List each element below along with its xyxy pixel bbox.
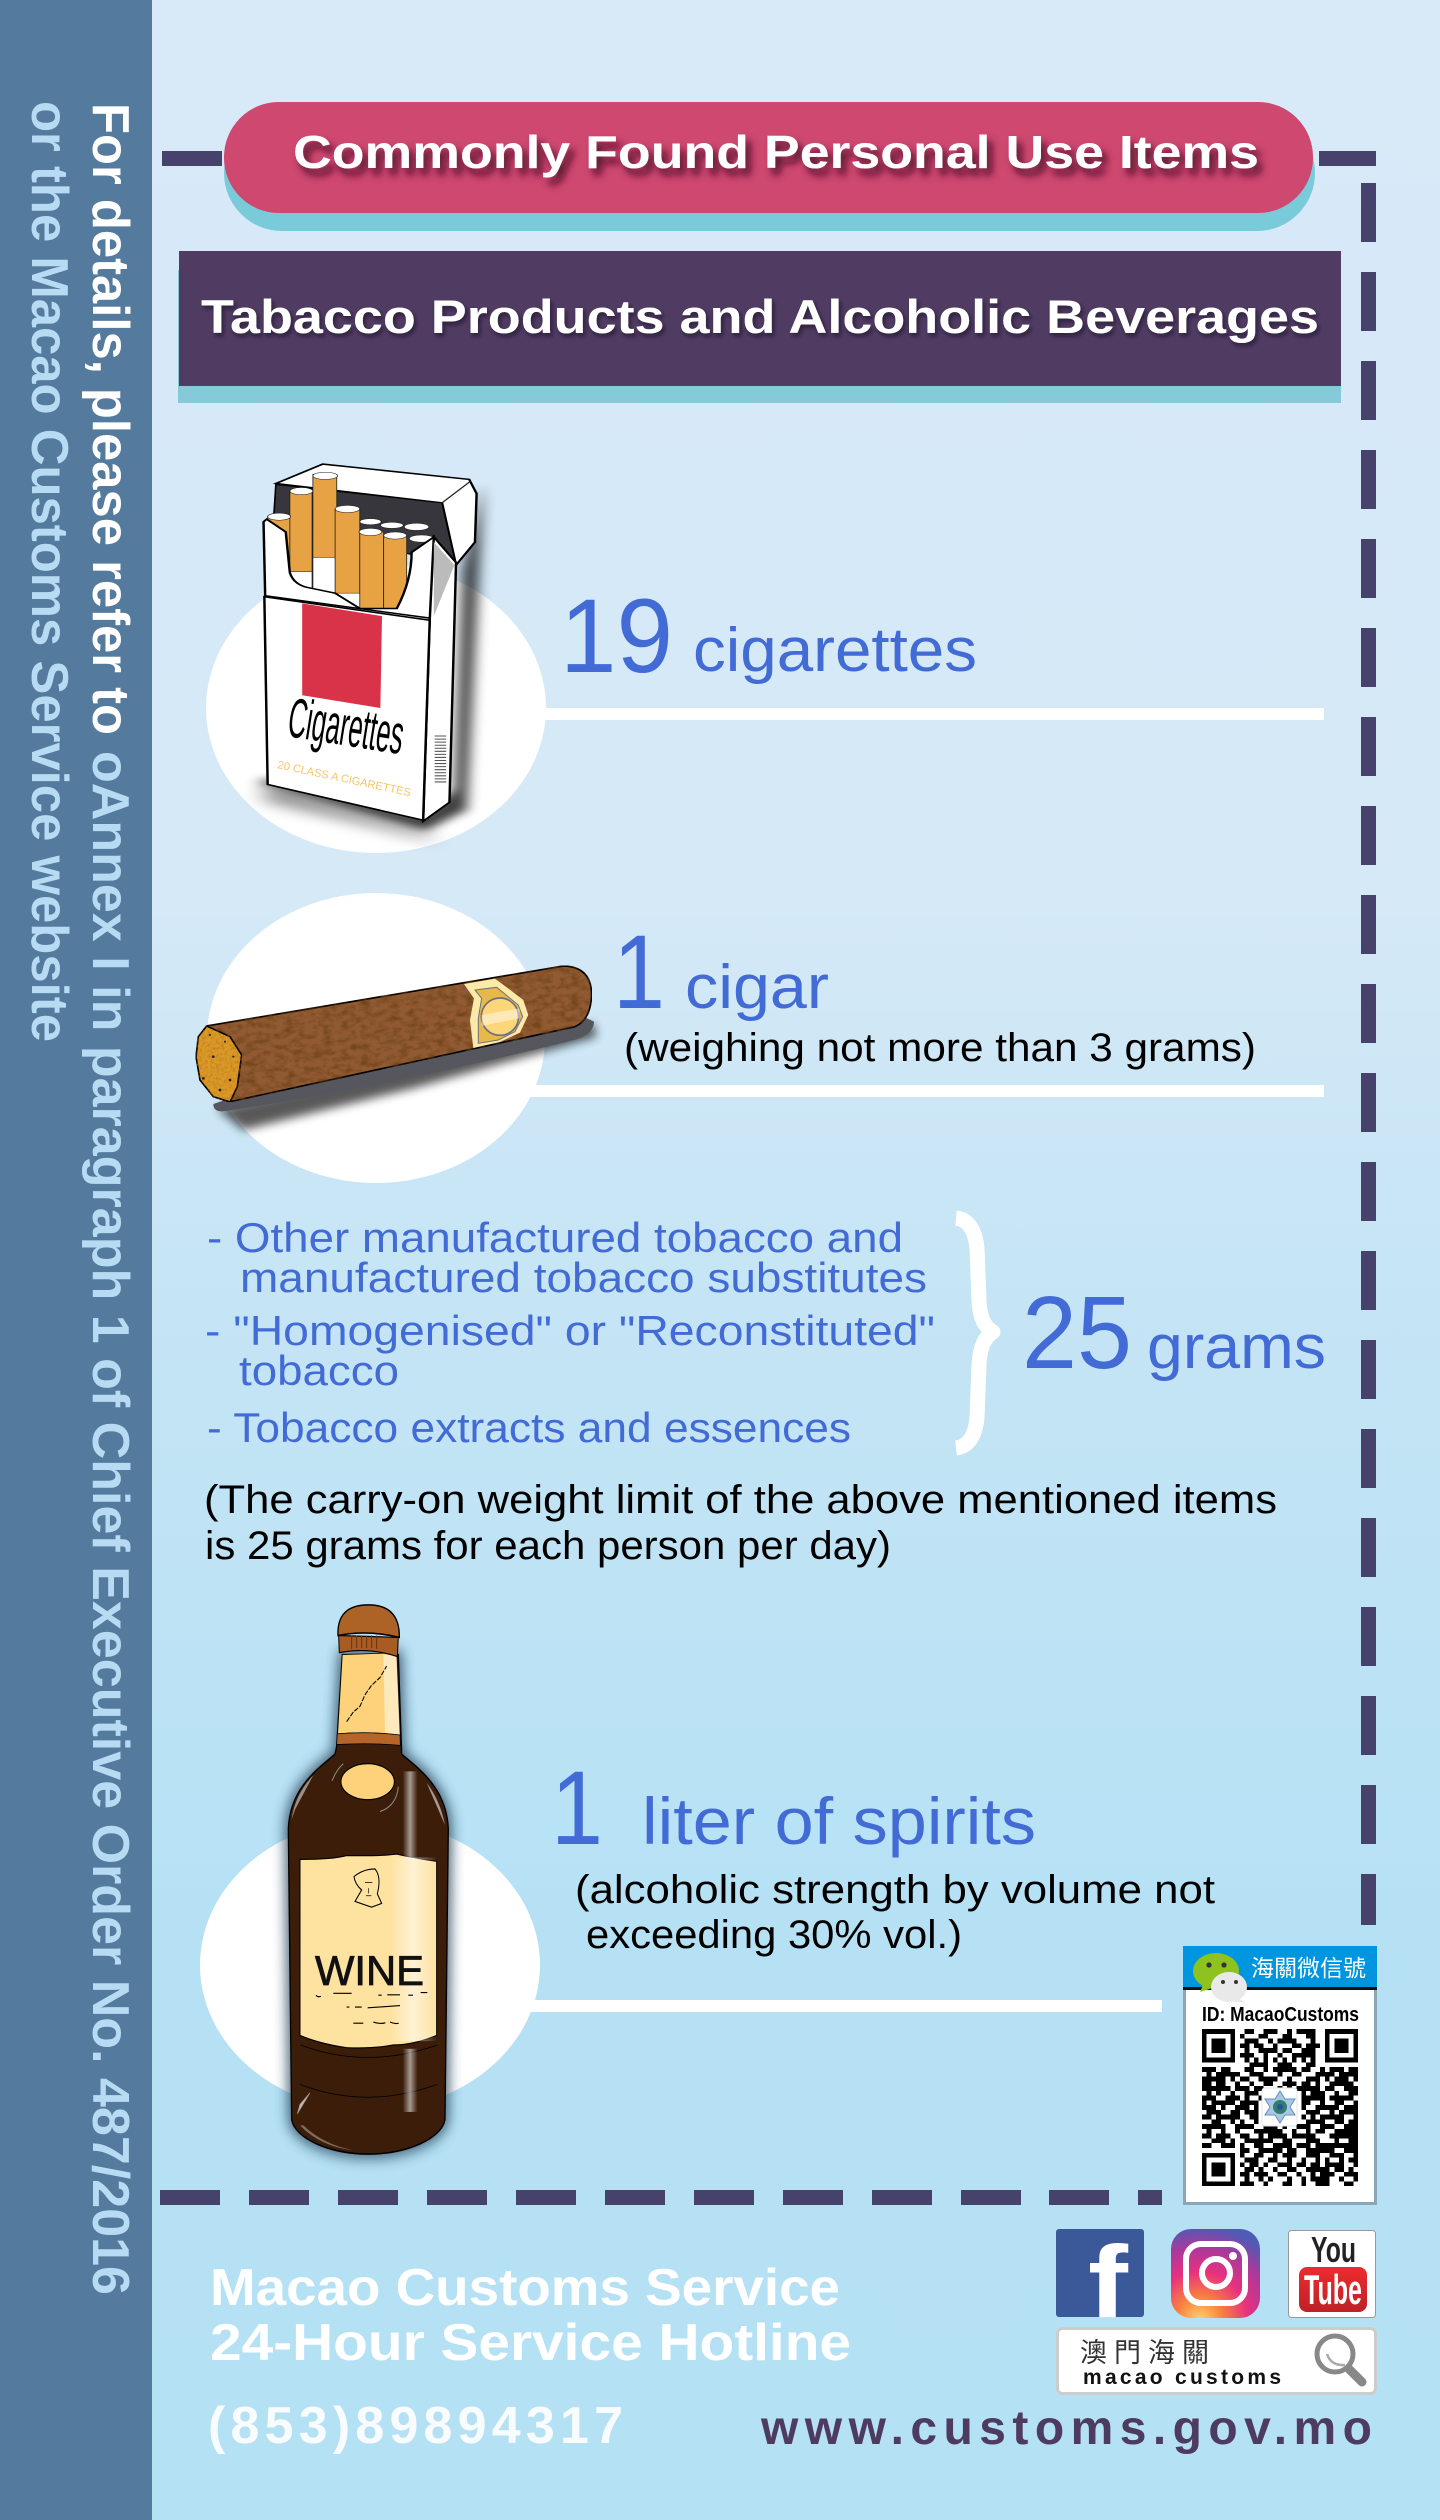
band	[464, 979, 528, 1048]
cigarettes	[268, 472, 434, 608]
text: 1 cigar: 1	[613, 914, 665, 1031]
search box	[1058, 2328, 1376, 2394]
neck label	[338, 1653, 400, 1735]
text: 19 cigarettes	[560, 578, 977, 695]
bottle label text: WINE	[315, 1947, 424, 1994]
list: other tobacco products: - Other manufactured tobacco and	[207, 1214, 903, 1261]
text: 1 liter of spirits	[551, 1750, 1036, 1867]
text: cigar weight note: (weighing not more than 3 grams)	[624, 1026, 1256, 1070]
pack front	[264, 597, 430, 820]
portrait	[354, 1869, 382, 1907]
text: 1 cigar	[613, 914, 829, 1031]
list: other tobacco products: - "Homogenised" or "Reconstituted"	[205, 1307, 935, 1354]
WeChat QR card	[1183, 1946, 1377, 2204]
hotline heading: Macao Customs Service	[210, 2259, 840, 2317]
cap	[339, 1635, 398, 1657]
text: 25 grams: 25	[1022, 1275, 1132, 1390]
text: carry-on note	[204, 1478, 1277, 1568]
section heading bar	[178, 251, 1341, 403]
icon: cigar	[196, 966, 597, 1130]
label scribbles	[316, 1993, 427, 2024]
list: other tobacco products: - Tobacco extracts and essences	[207, 1404, 851, 1451]
barcode	[435, 736, 446, 782]
text: carry-on note: (The carry-on weight limit of the above mentioned items	[204, 1478, 1277, 1522]
list: other tobacco products: tobacco	[239, 1347, 399, 1394]
white circle: cigarettes	[206, 563, 546, 853]
rule: cigar	[530, 1085, 1324, 1097]
text: 1 liter of spirits: liter of spirits	[642, 1784, 1036, 1858]
white circle: cigar	[207, 893, 545, 1183]
QR card id: ID: MacaoCustoms	[1202, 2004, 1359, 2026]
icon: Facebook: f	[1088, 2225, 1129, 2339]
hotline heading	[210, 2259, 851, 2372]
text: 25 grams: grams	[1147, 1313, 1326, 1382]
icon: cigarette pack	[257, 464, 483, 841]
title pill	[224, 102, 1315, 231]
rule: wine	[530, 2000, 1162, 2012]
QR code	[1202, 2029, 1358, 2186]
list: other tobacco products: manufactured tobacco substitutes	[240, 1254, 927, 1301]
pack small text: 20 CLASS A CIGARETTES	[276, 759, 412, 799]
text: spirits strength note: (alcoholic strength by volume not	[575, 1868, 1215, 1912]
pack side	[423, 537, 456, 821]
text: carry-on note: is 25 grams for each person per day)	[205, 1524, 891, 1568]
search box: macao customs	[1083, 2366, 1281, 2389]
icon: YouTube: Tube	[1304, 2266, 1362, 2313]
shoulder oval	[341, 1764, 394, 1800]
icon: magnifier	[1317, 2336, 1362, 2382]
icon: YouTube	[1288, 2229, 1376, 2318]
section heading text: Tabacco Products and Alcoholic Beverages	[201, 290, 1319, 343]
sidebar panel	[0, 0, 152, 2520]
QR card heading: 海關微信號	[1251, 1949, 1366, 1983]
white circle: wine	[200, 1820, 540, 2110]
text: 19 cigarettes: 19	[560, 578, 673, 695]
icon: wine bottle	[288, 1605, 448, 2154]
base lines and highlights	[300, 2045, 437, 2097]
sidebar note line 1: oAnnex I in paragraph 1 of Chief Executive Order No. 487/2016	[81, 751, 139, 2295]
text: 1 cigar: cigar	[685, 953, 829, 1022]
cut end	[196, 1026, 242, 1102]
icon: WeChat bubbles	[1193, 1953, 1247, 2003]
sidebar note line 1: For details, please refer to	[81, 103, 139, 735]
icon: YouTube: You	[1311, 2229, 1356, 2270]
hotline heading: 24-Hour Service Hotline	[210, 2314, 851, 2372]
dashed frame	[160, 151, 1376, 2205]
text: 1 liter of spirits: 1	[551, 1750, 603, 1867]
text: 19 cigarettes: cigarettes	[693, 616, 977, 685]
front flap	[264, 519, 434, 619]
main label	[300, 1854, 437, 2048]
text: spirits strength note: exceeding 30% vol.)	[586, 1913, 962, 1957]
QR centre emblem	[1262, 2088, 1297, 2126]
lid	[276, 464, 477, 565]
rule: cigarettes	[540, 708, 1324, 720]
red panel	[302, 603, 382, 708]
icon: Facebook	[1056, 2225, 1144, 2339]
text: 25 grams	[1022, 1275, 1326, 1390]
title text: Commonly Found Personal Use Items	[293, 126, 1259, 178]
search box: 澳門海關	[1080, 2331, 1216, 2370]
list: other tobacco products	[205, 1214, 935, 1451]
icon: Instagram	[1171, 2229, 1260, 2318]
sidebar note line 2: or the Macao Customs Service website	[20, 101, 78, 1042]
hotline number: (853)89894317	[208, 2397, 623, 2455]
website: www.customs.gov.mo	[760, 2402, 1372, 2455]
icon: cigarette pack: Cigarettes	[284, 686, 409, 766]
text: spirits strength note	[575, 1868, 1215, 1957]
brace	[956, 1218, 993, 1448]
